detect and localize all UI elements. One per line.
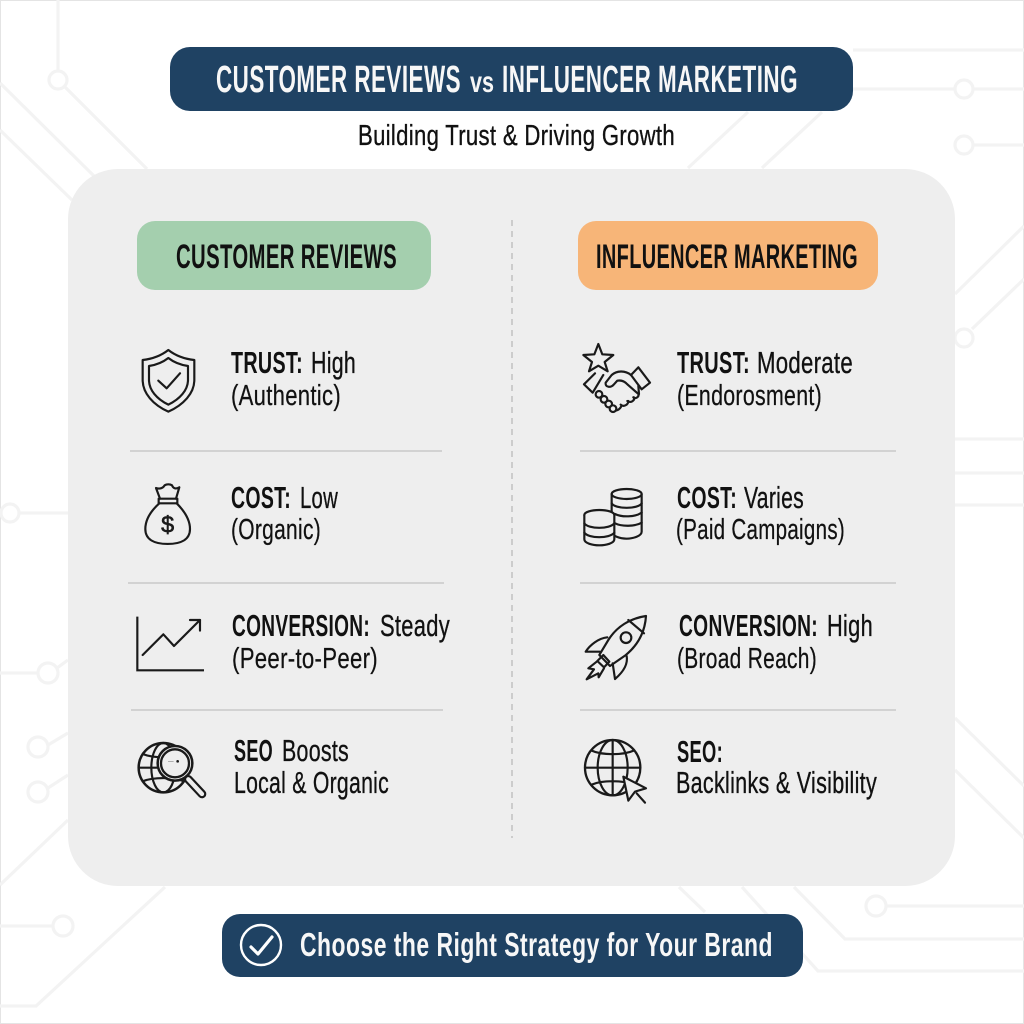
row: influencer seo: Backlinks & Visibility bbox=[676, 765, 877, 800]
row: influencer conversion bbox=[677, 608, 873, 675]
icon: money bag: $ bbox=[161, 512, 174, 538]
row: influencer seo: SEO: bbox=[677, 734, 723, 769]
row: customer cost bbox=[231, 480, 338, 546]
title banner bbox=[170, 47, 853, 111]
row: customer seo: SEO bbox=[234, 733, 273, 768]
row: influencer cost: COST: bbox=[677, 480, 737, 515]
call to action banner: Choose the Right Strategy for Your Brand bbox=[300, 926, 773, 963]
row: influencer conversion: High bbox=[827, 608, 873, 643]
row: customer seo: Local & Organic bbox=[234, 765, 389, 800]
title banner: INFLUENCER MARKETING bbox=[502, 59, 798, 101]
row: influencer trust: Moderate bbox=[757, 345, 853, 380]
row: customer trust: High bbox=[311, 345, 356, 380]
row: influencer cost: (Paid Campaigns) bbox=[676, 514, 845, 546]
icon: star and handshake bbox=[583, 344, 650, 412]
row: customer conversion bbox=[232, 608, 450, 675]
row: customer cost: Low bbox=[300, 480, 338, 515]
row: influencer trust: (Endorosment) bbox=[677, 380, 822, 412]
row: customer trust: TRUST: bbox=[231, 345, 303, 380]
icon: growth chart bbox=[137, 617, 204, 670]
icon: money bag bbox=[145, 484, 190, 544]
icon: check circle bbox=[241, 925, 281, 965]
row: customer conversion: Steady bbox=[380, 608, 450, 643]
heading: influencer marketing bbox=[578, 221, 878, 290]
row: influencer trust: TRUST: bbox=[677, 345, 750, 380]
row: influencer cost bbox=[676, 480, 845, 546]
row: customer conversion: CONVERSION: bbox=[232, 608, 370, 643]
row: customer trust bbox=[231, 345, 356, 412]
subtitle: Building Trust & Driving Growth bbox=[358, 120, 675, 152]
heading: customer reviews bbox=[137, 221, 431, 290]
title banner: vs bbox=[470, 66, 494, 99]
row: customer cost: COST: bbox=[231, 480, 291, 515]
row: customer seo: Boosts bbox=[282, 733, 349, 768]
row: influencer conversion: (Broad Reach) bbox=[677, 643, 817, 675]
row: customer cost: (Organic) bbox=[231, 514, 321, 546]
title banner: CUSTOMER REVIEWS bbox=[216, 59, 461, 101]
icon: rocket bbox=[586, 616, 646, 679]
row: customer conversion: (Peer-to-Peer) bbox=[232, 643, 378, 675]
row: influencer cost: Varies bbox=[744, 480, 804, 515]
row: customer seo bbox=[234, 733, 389, 800]
icon: coin stacks bbox=[584, 489, 642, 545]
icon: globe with magnifier bbox=[139, 743, 202, 794]
icon: globe with cursor bbox=[585, 740, 646, 803]
icon: shield with check bbox=[143, 350, 194, 412]
call to action banner bbox=[222, 914, 803, 977]
row: influencer conversion: CONVERSION: bbox=[679, 608, 818, 643]
panel: comparison card bbox=[68, 169, 955, 886]
row: influencer trust bbox=[677, 345, 853, 412]
row: customer trust: (Authentic) bbox=[231, 380, 341, 412]
row: influencer seo bbox=[676, 734, 877, 800]
heading: customer reviews: CUSTOMER REVIEWS bbox=[176, 238, 397, 276]
